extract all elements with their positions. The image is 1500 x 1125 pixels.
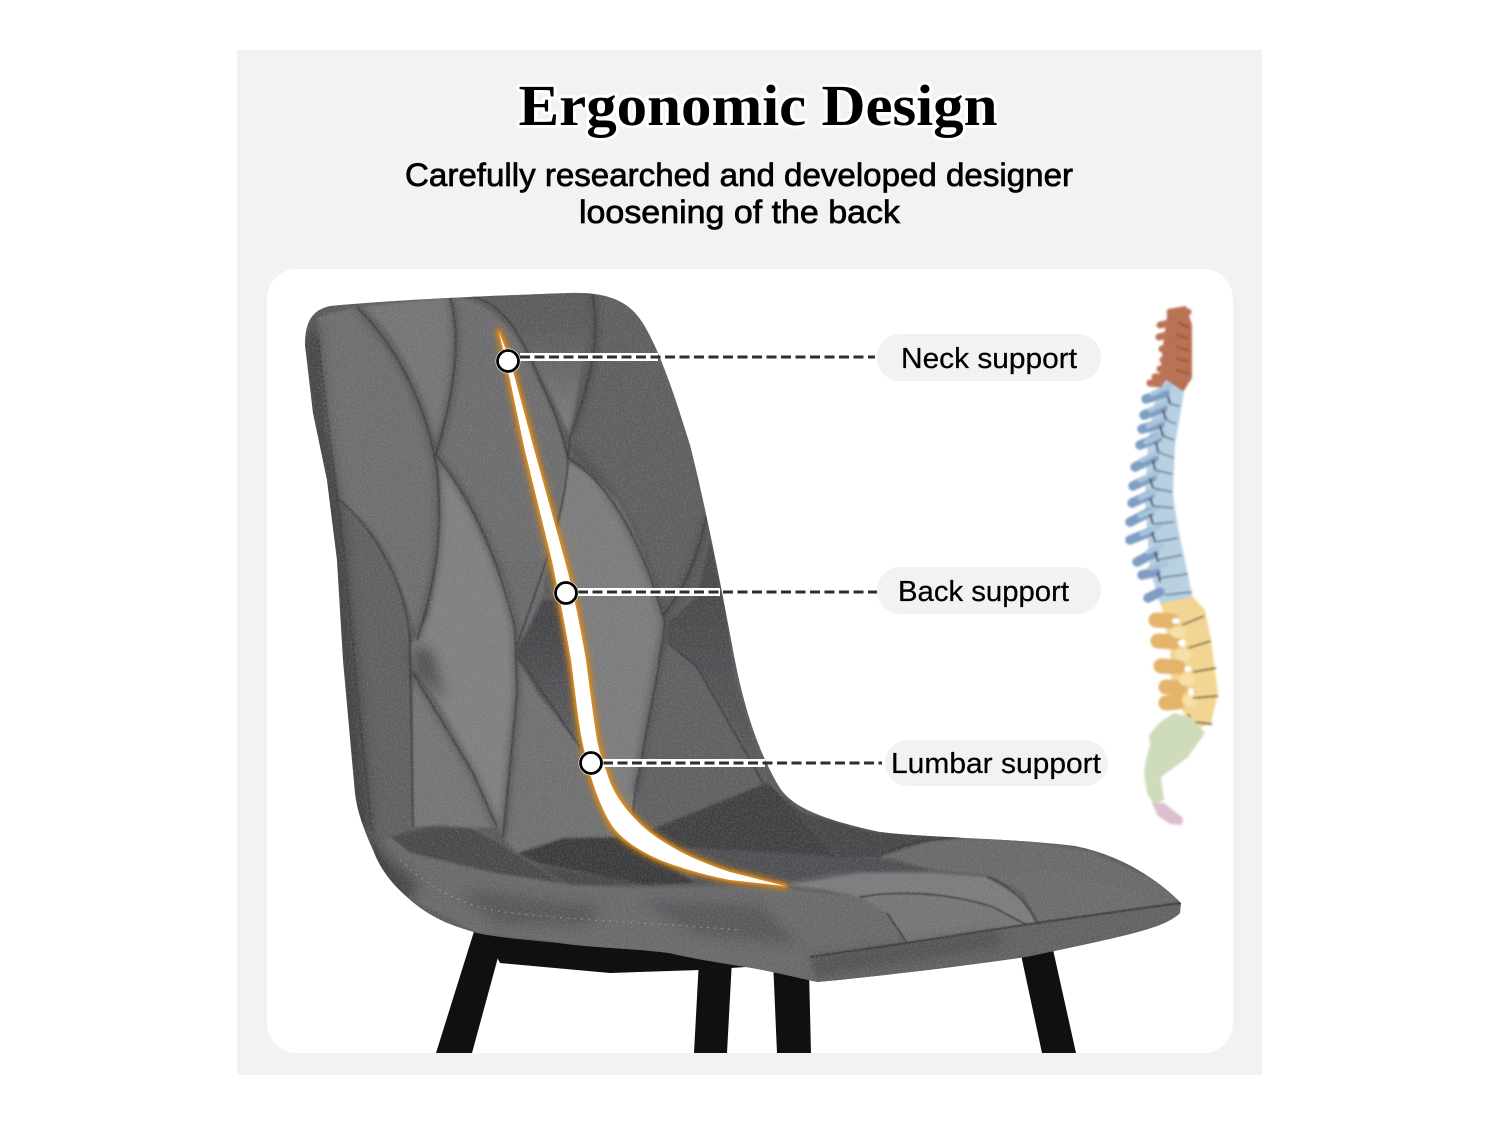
callout: lumbar support: Lumbar support xyxy=(891,748,1101,780)
velvet texture xyxy=(300,285,1190,985)
seat dark band xyxy=(677,847,935,883)
front left cushion xyxy=(787,873,1037,925)
callout: neck support xyxy=(496,334,1101,381)
white inner panel xyxy=(267,269,1233,1053)
soft shading xyxy=(303,318,1000,975)
subtitle: loosening of the back xyxy=(579,194,901,230)
chair upholstery xyxy=(300,285,1190,985)
outer grey panel xyxy=(237,50,1262,1075)
subtitle: Carefully researched and developed designer xyxy=(405,157,1073,193)
rear dark seat xyxy=(770,787,960,857)
subtitle xyxy=(405,157,1073,230)
rim dark S xyxy=(390,827,563,883)
callout: back support xyxy=(554,567,1101,614)
panel right of spine line xyxy=(559,462,664,812)
callout: lumbar support xyxy=(578,740,1108,786)
thoracic vertebrae xyxy=(1130,380,1193,606)
callout: neck support: Neck support xyxy=(901,343,1077,375)
rear cushion xyxy=(877,838,1182,907)
title: Ergonomic Design xyxy=(518,73,998,138)
lower left triangle xyxy=(413,673,497,828)
dark panel N xyxy=(518,600,568,693)
front right cushion xyxy=(990,870,1150,923)
top center diamond xyxy=(438,298,566,570)
dark wedge xyxy=(650,783,832,857)
chair xyxy=(300,285,1190,1053)
panel below left bolster xyxy=(382,546,386,553)
right corner panel xyxy=(573,294,706,516)
coccyx xyxy=(1152,803,1183,825)
callout: back support: Back support xyxy=(898,576,1069,608)
dark T2 xyxy=(537,865,647,885)
icon: spine xyxy=(1130,306,1218,825)
spine curve highlight xyxy=(499,332,785,886)
front band xyxy=(810,903,1182,985)
top center-left panel xyxy=(357,297,456,450)
seat rim xyxy=(375,837,907,985)
lumbar vertebrae xyxy=(1156,597,1218,730)
panel Q xyxy=(633,643,763,830)
seams xyxy=(318,293,1182,957)
panel O xyxy=(505,660,617,853)
cervical vertebrae xyxy=(1150,306,1192,392)
left bolster xyxy=(317,307,439,637)
top right panel xyxy=(468,293,596,437)
soft crease shading xyxy=(357,293,706,837)
stitch line on rim xyxy=(400,860,740,930)
panel M xyxy=(521,583,544,640)
chair legs xyxy=(436,925,1076,1053)
front mid cushion xyxy=(860,893,1027,943)
dark T xyxy=(518,837,697,885)
right dark panel P xyxy=(667,540,763,773)
central light panel xyxy=(410,456,517,837)
sacrum xyxy=(1144,713,1205,805)
